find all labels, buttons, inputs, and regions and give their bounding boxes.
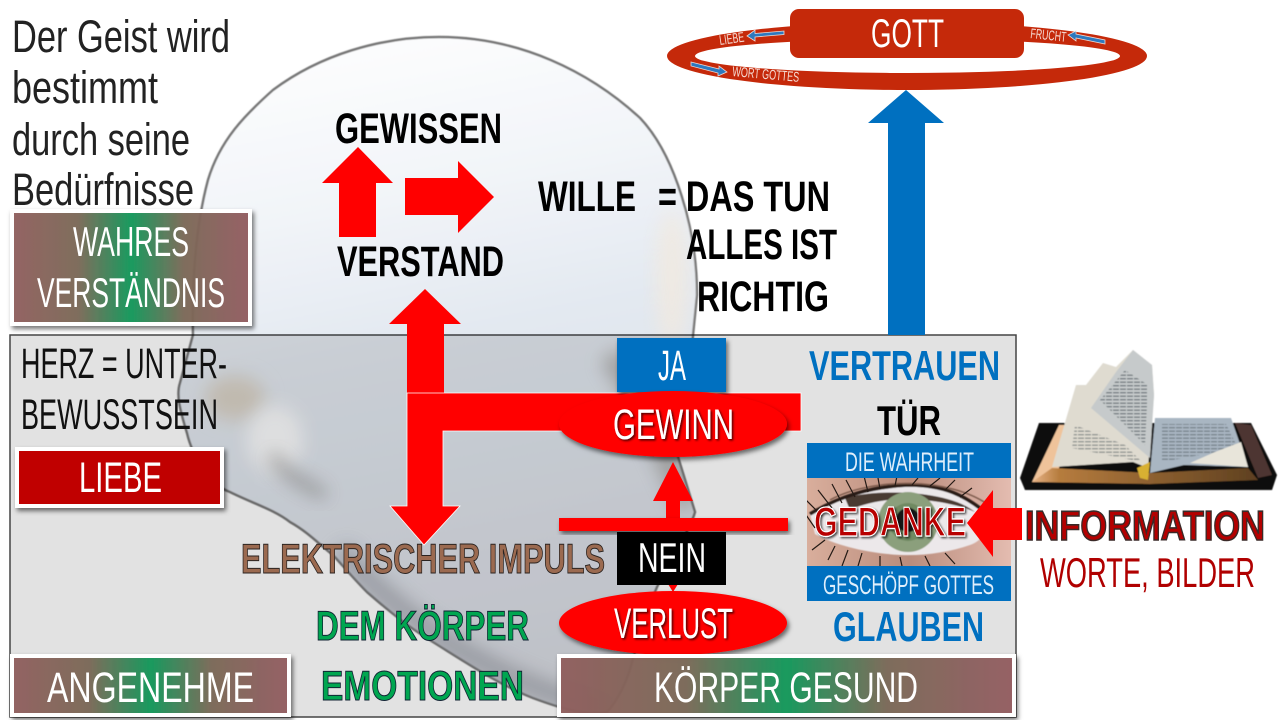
bar: geschöpf gottes: GESCHÖPF GOTTES [823, 570, 994, 600]
label: tür: TÜR [877, 397, 941, 444]
head silhouette [178, 37, 697, 713]
god ring: LIEBE [718, 29, 745, 48]
box: ja: JA [658, 342, 686, 390]
box: nein [617, 532, 726, 592]
arrow: information to gedanke [967, 490, 1022, 557]
bar: geschöpf gottes [807, 566, 1011, 601]
box: nein: NEIN [638, 534, 706, 581]
heading: spirit is determined by its needs: durch seine [12, 114, 190, 165]
god ring: FRUCHT [1030, 25, 1067, 45]
arrow: up from heart to verstand [389, 289, 461, 393]
arrow: to wille [405, 161, 494, 233]
heading: spirit is determined by its needs: Bedürfnisse [12, 164, 194, 215]
arrow: verstand up to gewissen [322, 147, 393, 237]
image: open book [1020, 350, 1277, 490]
arrow: horizontal bar and down to impulse [390, 393, 801, 545]
label: emotionen: EMOTIONEN [321, 662, 524, 709]
heading: spirit is determined by its needs: Der Geist wird [12, 11, 230, 62]
box: körper gesund: KÖRPER GESUND [654, 664, 918, 712]
box: liebe: LIEBE [79, 454, 162, 502]
label: glauben: GLAUBEN [833, 603, 984, 650]
box: angenehme: ANGENEHME [47, 664, 254, 712]
label: vertrauen: VERTRAUEN [809, 342, 1000, 389]
god ring [667, 9, 1147, 90]
bar: die wahrheit [807, 443, 1011, 478]
box: wahres verständnis [12, 211, 250, 324]
box: wahres verständnis: WAHRES [73, 218, 189, 265]
bar: decision line [559, 518, 788, 531]
ellipse: verlust [559, 591, 787, 655]
label: elektrischer impuls: ELEKTRISCHER IMPULS [241, 535, 605, 582]
bar: die wahrheit: DIE WAHRHEIT [845, 447, 974, 477]
label: dem körper: DEM KÖRPER [316, 602, 529, 649]
image: eye [804, 476, 1011, 566]
panel: heart / subconscious [10, 335, 1016, 717]
text: wille = das tun, alles ist richtig: RICHTIG [697, 273, 829, 321]
label: gewissen: GEWISSEN [335, 105, 502, 153]
label: gedanke: GEDANKE [814, 498, 966, 545]
text: wille = das tun, alles ist richtig: WILLE [538, 173, 636, 221]
label: gott: GOTT [871, 12, 944, 56]
box: körper gesund [559, 656, 1014, 715]
text: wille = das tun, alles ist richtig [538, 173, 837, 321]
text: wille = das tun, alles ist richtig: ALLES IST [686, 221, 837, 269]
text: herz = unterbewusstsein: HERZ = UNTER- [21, 340, 227, 388]
box: wahres verständnis: VERSTÄNDNIS [37, 269, 225, 316]
god ring: WORT GOTTES [732, 63, 800, 85]
ellipse: verlust: VERLUST [614, 600, 733, 648]
box: ja [617, 338, 726, 392]
ellipse: gewinn [559, 391, 787, 457]
text: herz = unterbewusstsein: BEWUSSTSEIN [21, 391, 218, 439]
heading: spirit is determined by its needs: bestimmt [12, 62, 158, 113]
text: wille = das tun, alles ist richtig: = DAS TUN [658, 173, 830, 221]
heading: spirit is determined by its needs [12, 11, 230, 215]
ellipse: gewinn: GEWINN [613, 401, 734, 449]
label: verstand: VERSTAND [337, 238, 504, 286]
arrow: blue up to god [868, 90, 944, 335]
box: liebe [17, 449, 222, 506]
arrow: small up to gewinn [653, 462, 693, 520]
text: herz = unterbewusstsein [21, 340, 227, 439]
box: angenehme [12, 656, 289, 715]
